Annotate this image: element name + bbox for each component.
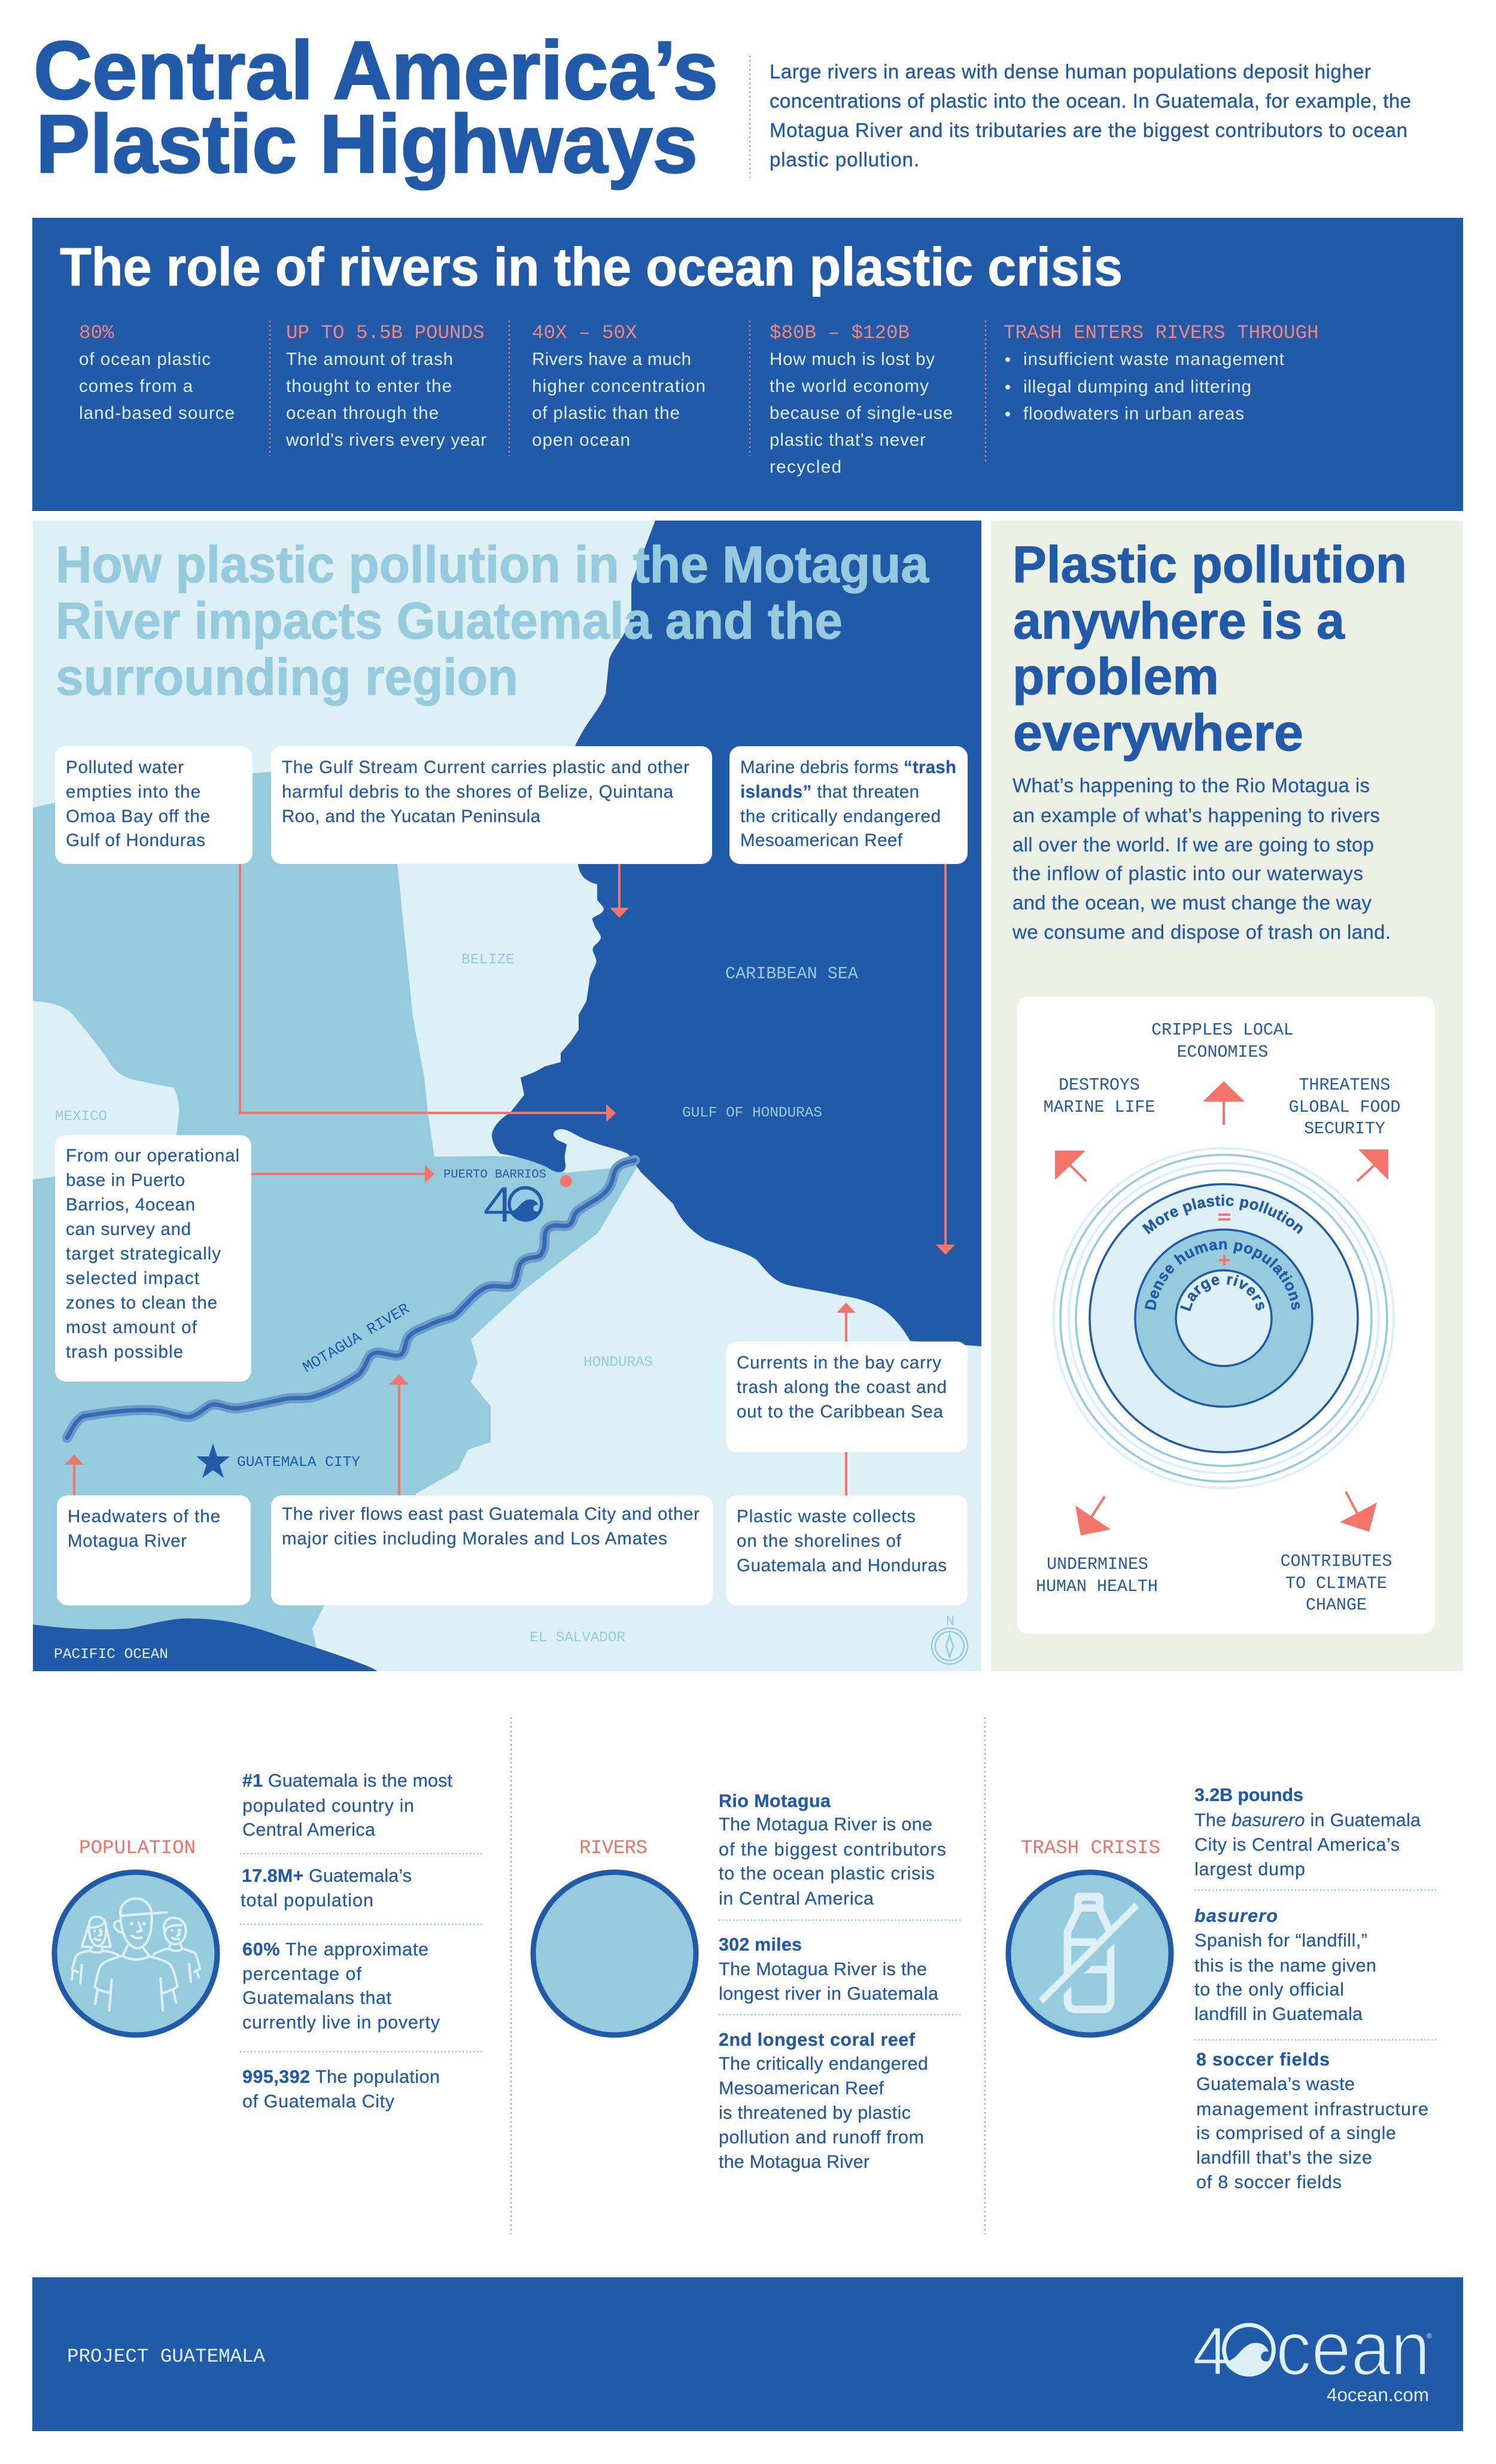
- panel: plastic pollution anywhere: [991, 521, 1462, 1671]
- text block: river facts: The critically endangered: [719, 2054, 928, 2074]
- card: currents: [726, 1341, 968, 1452]
- logo: 4ocean: 4ocean.com: [1327, 2384, 1429, 2405]
- text block: population facts: populated country in: [242, 1796, 414, 1816]
- label: food security: GLOBAL FOOD: [1289, 1098, 1400, 1117]
- label: climate change: TO CLIMATE: [1285, 1574, 1387, 1593]
- arrow: trash islands: [936, 864, 955, 1255]
- text block: population facts: Guatemalans that: [242, 1988, 392, 2008]
- stat: trash enters rivers: insufficient waste management: [1023, 349, 1284, 369]
- icon: compass: N: [946, 1614, 954, 1630]
- arrow: Omoa Bay to Gulf: [240, 864, 616, 1122]
- map labels: PACIFIC OCEAN: [54, 1647, 168, 1663]
- text block: river facts: of the biggest contributors: [719, 1839, 946, 1860]
- stat: 5.5B pounds: [285, 322, 486, 450]
- card: shoreline waste: [726, 1495, 968, 1605]
- stat: 40x-50x: of plastic than the: [532, 403, 680, 423]
- stat: trash enters rivers: TRASH ENTERS RIVERS THROUGH: [1004, 322, 1319, 344]
- stat: trash enters rivers: illegal dumping and littering: [1023, 377, 1251, 397]
- footer: project label: PROJECT GUATEMALA: [67, 2346, 265, 2368]
- map: Pacific Ocean: [33, 1619, 377, 1671]
- stat: $80B-$120B: [770, 322, 953, 477]
- text block: population facts: #1 Guatemala is the most: [242, 1771, 453, 1791]
- card: operational base: selected impact: [66, 1268, 199, 1288]
- heading: rivers: RIVERS: [579, 1837, 647, 1859]
- text block: trash facts: of 8 soccer fields: [1196, 2172, 1342, 2192]
- section: rivers: [533, 1791, 962, 2172]
- icon: 4ocean mark: [483, 1176, 542, 1233]
- card: headwaters: [57, 1495, 251, 1605]
- card: Gulf Stream: [271, 746, 712, 864]
- title: Plastic Highways: [36, 98, 698, 190]
- text block: river facts: in Central America: [719, 1888, 874, 1909]
- card: trash islands: the critically endangered: [740, 807, 941, 826]
- logo: 4ocean: cean: [1276, 2306, 1430, 2392]
- stat: 5.5B pounds: The amount of trash: [286, 349, 453, 369]
- text block: population facts: 995,392 The population: [242, 2067, 440, 2087]
- text block: river facts: the Motagua River: [719, 2152, 869, 2172]
- card: trash islands: Marine debris forms “trash: [740, 758, 956, 777]
- stat: $80B-$120B: plastic that's never: [770, 430, 926, 450]
- map: Caribbean Sea: [492, 521, 981, 1346]
- heading: trash crisis: TRASH CRISIS: [1021, 1837, 1160, 1859]
- icon: people: [54, 1872, 217, 2035]
- body text: [1012, 774, 1391, 943]
- text block: river facts: pollution and runoff from: [719, 2127, 924, 2147]
- stat: 40x-50x: [532, 322, 706, 450]
- heading: map: [56, 536, 929, 706]
- body text: and the ocean, we must change the way: [1012, 892, 1372, 914]
- map labels: HONDURAS: [583, 1355, 653, 1371]
- label: marine life: MARINE LIFE: [1044, 1098, 1155, 1117]
- card: operational base: trash possible: [66, 1342, 183, 1362]
- arrow: lower right: [1340, 1492, 1377, 1532]
- text block: river facts: Mesoamerican Reef: [719, 2078, 884, 2098]
- body text: the inflow of plastic into our waterways: [1012, 862, 1363, 884]
- card: Omoa Bay: [55, 746, 253, 864]
- label: human health: [1036, 1555, 1158, 1596]
- stat: 80%: [79, 322, 235, 423]
- text block: trash facts: Spanish for “landfill,”: [1194, 1930, 1367, 1951]
- text block: trash facts: 3.2B pounds: [1194, 1785, 1303, 1805]
- text block: river facts: The Motagua River is the: [719, 1959, 927, 1979]
- heading: map: River impacts Guatemala and the: [56, 592, 843, 650]
- card: shoreline waste: on the shorelines of: [737, 1531, 902, 1551]
- icon: river circle: [533, 1872, 696, 2035]
- label: economies: CRIPPLES LOCAL: [1151, 1021, 1294, 1040]
- label: climate change: CONTRIBUTES: [1281, 1552, 1392, 1571]
- card: Gulf Stream: The Gulf Stream Current carries plastic and other: [282, 758, 689, 777]
- intro text block: Large rivers in areas with dense human populations deposit higher: [770, 60, 1371, 83]
- text block: river facts: longest river in Guatemala: [719, 1984, 938, 2004]
- label: food security: [1289, 1076, 1400, 1139]
- map: Mexico land: [33, 1001, 179, 1179]
- text block: population facts: 60% The approximate: [242, 1939, 428, 1960]
- label: food security: THREATENS: [1299, 1076, 1390, 1095]
- text block: trash facts: [1194, 1785, 1437, 2192]
- text block: river facts: Rio Motagua: [719, 1791, 831, 1811]
- stat: 5.5B pounds: ocean through the: [286, 403, 439, 423]
- card: Omoa Bay: Gulf of Honduras: [66, 831, 205, 850]
- text block: trash facts: basurero: [1194, 1906, 1278, 1926]
- map: Guatemala land: [33, 772, 638, 1671]
- card: river flow: [271, 1495, 713, 1605]
- card: shoreline waste: Plastic waste collects: [737, 1507, 916, 1526]
- panel: map: [33, 521, 981, 1671]
- text block: trash facts: landfill that’s the size: [1196, 2147, 1372, 2168]
- stat: 80%: land-based source: [79, 403, 235, 423]
- arrow: up: [1203, 1081, 1245, 1125]
- intro text block: [750, 56, 1411, 178]
- card: currents: Currents in the bay carry: [737, 1353, 941, 1373]
- arrow: headwaters: [65, 1455, 84, 1495]
- arrow: upper right: [1357, 1149, 1388, 1181]
- stat: $80B-$120B: $80B – $120B: [770, 322, 910, 344]
- heading: plastic pollution: Plastic pollution: [1012, 536, 1407, 594]
- heading: plastic pollution: anywhere is a: [1013, 592, 1345, 650]
- section: trash crisis: [1008, 1785, 1437, 2192]
- text block: population facts: of Guatemala City: [242, 2091, 395, 2112]
- stat: trash enters rivers: floodwaters in urban areas: [1023, 404, 1244, 424]
- text block: trash facts: to the only official: [1194, 1979, 1344, 2000]
- card: operational base: most amount of: [66, 1318, 197, 1337]
- icon: Guatemala City star: [196, 1443, 230, 1478]
- logo: 4ocean: ®: [1427, 2332, 1432, 2340]
- label: economies: [1151, 1021, 1294, 1062]
- map labels: EL SALVADOR: [530, 1630, 625, 1646]
- icon: crossed-out bottle: [1008, 1872, 1171, 2035]
- stat: 5.5B pounds: thought to enter the: [286, 376, 452, 396]
- title: Central America’s: [34, 25, 718, 117]
- card: operational base: can survey and: [66, 1219, 191, 1239]
- text block: population facts: 17.8M+ Guatemala’s: [242, 1866, 412, 1886]
- card: operational base: From our operational: [66, 1146, 239, 1166]
- label: marine life: [1044, 1076, 1155, 1117]
- heading: map: How plastic pollution in the Motagua: [56, 536, 929, 594]
- heading: plastic pollution: problem: [1012, 648, 1219, 705]
- text block: trash facts: largest dump: [1194, 1859, 1305, 1879]
- card: Omoa Bay: empties into the: [66, 782, 200, 802]
- text block: trash facts: 8 soccer fields: [1196, 2049, 1330, 2070]
- text block: river facts: 2nd longest coral reef: [719, 2030, 916, 2050]
- stat: 40x-50x: Rivers have a much: [532, 349, 691, 369]
- map labels: GUATEMALA CITY: [237, 1455, 360, 1471]
- label: human health: UNDERMINES: [1047, 1555, 1148, 1574]
- card: Gulf Stream: harmful debris to the shores of Belize, Quintana: [282, 782, 674, 802]
- arrow: river flow: [390, 1374, 409, 1495]
- map labels: PUERTO BARRIOS: [443, 1168, 546, 1182]
- body text: What’s happening to the Rio Motagua is: [1012, 774, 1370, 796]
- map labels: GULF OF HONDURAS: [682, 1105, 822, 1121]
- heading: map: surrounding region: [56, 649, 518, 706]
- card: currents: trash along the coast and: [737, 1377, 947, 1397]
- stat: 80%: comes from a: [79, 376, 193, 396]
- label: climate change: CHANGE: [1306, 1596, 1367, 1615]
- text block: river facts: [719, 1791, 962, 2172]
- card: operational base: base in Puerto: [66, 1170, 185, 1190]
- card: headwaters: Motagua River: [68, 1531, 187, 1551]
- text block: trash facts: management infrastructure: [1196, 2099, 1428, 2119]
- body text: all over the world. If we are going to stop: [1012, 833, 1374, 856]
- stat: trash enters rivers: [1004, 322, 1319, 424]
- stat: $80B-$120B: recycled: [770, 457, 841, 477]
- intro text block: Motagua River and its tributaries are the biggest contributors to ocean: [770, 119, 1407, 141]
- text block: population facts: Central America: [242, 1820, 375, 1840]
- arrow: Gulf Stream: [610, 864, 629, 918]
- body text: we consume and dispose of trash on land.: [1012, 921, 1391, 943]
- stat: 80%: of ocean plastic: [79, 349, 211, 369]
- logo: 4ocean: 4: [1193, 2313, 1229, 2389]
- arrow: lower left: [1075, 1496, 1111, 1535]
- icon: compass: [932, 1614, 968, 1664]
- label: human health: HUMAN HEALTH: [1036, 1577, 1158, 1596]
- card: trash islands: islands” that threaten: [740, 782, 919, 802]
- stat: 5.5B pounds: world's rivers every year: [285, 430, 486, 450]
- heading: role of rivers: The role of rivers in the ocean plastic crisis: [60, 238, 1123, 297]
- arrow: Puerto Barrios: [251, 1165, 434, 1183]
- card: river flow: The river flows east past Guatemala City and other: [282, 1504, 700, 1524]
- text block: population facts: percentage of: [242, 1964, 362, 1984]
- map labels: MEXICO: [55, 1109, 107, 1125]
- footer: [32, 2277, 1463, 2431]
- card: trash islands: [729, 746, 968, 864]
- heading: plastic pollution: everywhere: [1013, 704, 1303, 762]
- text block: river facts: The Motagua River is one: [719, 1814, 932, 1835]
- card: river flow: major cities including Morales and Los Amates: [282, 1529, 667, 1549]
- map labels: CARIBBEAN SEA: [725, 964, 859, 984]
- card: shoreline waste: Guatemala and Honduras: [737, 1556, 947, 1575]
- label: economies: ECONOMIES: [1177, 1043, 1268, 1062]
- text block: river facts: to the ocean plastic crisis: [719, 1863, 935, 1884]
- panel: role of rivers: [32, 218, 1463, 511]
- section: population: [54, 1771, 483, 2112]
- text block: population facts: currently live in poverty: [242, 2012, 440, 2033]
- icon: 4ocean mark: 4: [483, 1176, 514, 1233]
- stat: 40x-50x: open ocean: [532, 430, 630, 450]
- stat: 5.5B pounds: UP TO 5.5B POUNDS: [286, 322, 485, 344]
- label: marine life: DESTROYS: [1059, 1076, 1140, 1095]
- card: Omoa Bay: Omoa Bay off the: [66, 807, 210, 826]
- logo: 4ocean: [1193, 2306, 1432, 2405]
- card: operational base: zones to clean the: [66, 1293, 217, 1313]
- diagram: concentric circles: More plastic pollution: [1142, 1194, 1303, 1234]
- text block: trash facts: this is the name given: [1194, 1955, 1376, 1976]
- stat: 80%: 80%: [79, 322, 114, 344]
- card: operational base: Barrios, 4ocean: [66, 1195, 195, 1215]
- intro text block: concentrations of plastic into the ocean. In Guatemala, for example, the: [770, 90, 1411, 112]
- text block: population facts: [240, 1771, 483, 2112]
- card: operational base: [55, 1135, 251, 1382]
- card: headwaters: Headwaters of the: [68, 1507, 220, 1526]
- map labels: BELIZE: [461, 952, 515, 968]
- stat: 40x-50x: 40X – 50X: [532, 322, 637, 344]
- text block: trash facts: is comprised of a single: [1196, 2123, 1396, 2143]
- map labels: [54, 952, 859, 1663]
- stat: 40x-50x: higher concentration: [532, 376, 706, 396]
- text block: trash facts: Guatemala’s waste: [1196, 2074, 1355, 2094]
- card: Omoa Bay: Polluted water: [66, 758, 184, 777]
- diagram: concentric circles: [1053, 1147, 1395, 1489]
- map labels: MOTAGUA RIVER: [300, 1300, 413, 1377]
- text block: trash facts: landfill in Guatemala: [1194, 2004, 1363, 2024]
- title: [34, 25, 718, 190]
- body text: an example of what’s happening to rivers: [1012, 804, 1380, 826]
- text block: trash facts: The basurero in Guatemala: [1194, 1810, 1421, 1830]
- heading: plastic pollution: [1012, 536, 1407, 762]
- icon: Puerto Barrios marker: [560, 1175, 572, 1187]
- card: currents: out to the Caribbean Sea: [737, 1402, 944, 1422]
- map: Motagua River: [67, 1160, 635, 1438]
- stat: $80B-$120B: because of single-use: [770, 403, 953, 423]
- arrow: currents: [837, 1303, 856, 1495]
- text block: population facts: total population: [241, 1890, 373, 1911]
- arrow: upper left: [1055, 1151, 1086, 1181]
- stat: $80B-$120B: the world economy: [770, 376, 929, 396]
- card: operational base: target strategically: [66, 1244, 221, 1264]
- diagram: concentric circles: Dense human populations: [1145, 1241, 1300, 1310]
- card: impacts diagram: [1017, 996, 1435, 1634]
- text block: trash facts: City is Central America’s: [1194, 1835, 1400, 1855]
- card: trash islands: Mesoamerican Reef: [740, 831, 903, 850]
- text block: river facts: is threatened by plastic: [719, 2103, 911, 2123]
- stat: $80B-$120B: How much is lost by: [770, 349, 935, 369]
- card: Gulf Stream: Roo, and the Yucatan Peninsula: [282, 807, 541, 826]
- heading: population: POPULATION: [79, 1837, 196, 1859]
- diagram: concentric circles: Large rivers: [1180, 1274, 1264, 1312]
- text block: river facts: 302 miles: [719, 1934, 802, 1955]
- label: food security: SECURITY: [1304, 1120, 1385, 1139]
- intro text block: plastic pollution.: [770, 148, 919, 171]
- label: climate change: [1281, 1552, 1392, 1615]
